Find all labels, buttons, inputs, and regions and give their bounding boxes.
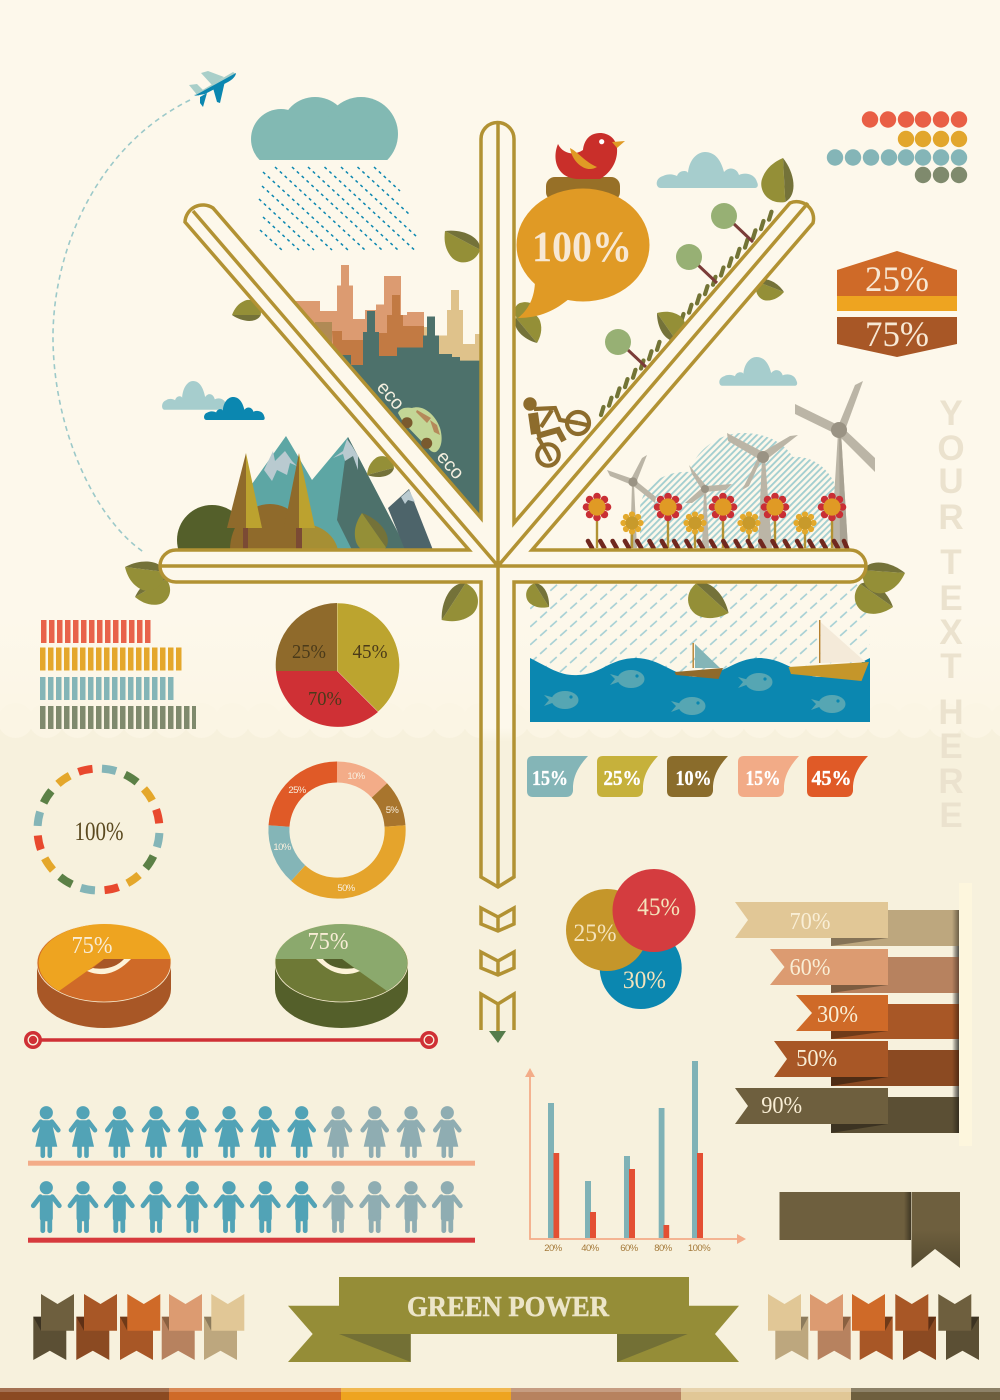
leaves — [122, 158, 906, 633]
percentage tags — [527, 756, 868, 797]
ribbon stack: 60% — [790, 955, 830, 981]
percentage tags: 15% — [532, 766, 568, 790]
percentage tags: 25% — [604, 766, 642, 790]
vertical heading: your text here: E — [939, 796, 963, 835]
vertical heading: your text here: Y — [939, 394, 963, 433]
venn circles: 30% — [623, 967, 666, 994]
icon: clouds right — [657, 152, 797, 386]
tree outline — [160, 122, 866, 887]
icon: green arrow head — [489, 1031, 506, 1043]
100% label: 100% — [532, 224, 632, 271]
icon: round trees on branch — [605, 203, 753, 367]
venn circles: 45% — [637, 894, 680, 921]
grass along branch — [601, 212, 772, 415]
percentage tags: 15% — [746, 766, 780, 790]
vertical heading: your text here: E — [939, 727, 963, 766]
flight path dashed arc — [53, 100, 190, 553]
venn circles — [566, 869, 696, 1009]
road label eco: eco — [372, 377, 408, 414]
pie chart — [276, 603, 400, 727]
dot matrix legend — [827, 111, 967, 183]
ribbon stack: 50% — [796, 1046, 837, 1072]
icon: cyclist — [523, 397, 589, 466]
vertical heading: your text here: O — [937, 429, 965, 468]
vertical heading: your text here: T — [940, 543, 962, 582]
bar chart: 20% — [544, 1243, 563, 1254]
scene: wind farm hills — [583, 381, 875, 548]
label 75%: 75% — [865, 314, 929, 354]
label 75%: 75% — [72, 933, 112, 959]
windmill — [727, 433, 798, 548]
vertical heading: your text here: R — [938, 762, 964, 801]
percentage tags: 10% — [676, 766, 712, 790]
windmill — [685, 465, 732, 548]
pie chart: 70% — [308, 688, 342, 710]
ribbon stack: 70% — [790, 909, 830, 935]
icon: bird on nest — [546, 133, 625, 201]
pie chart: 45% — [352, 641, 388, 663]
vertical heading: your text here: U — [938, 462, 964, 501]
ground strokes — [588, 541, 847, 548]
bar chart: 40% — [581, 1243, 600, 1254]
bookmarks left — [33, 1294, 244, 1360]
rain dashes — [259, 167, 417, 250]
panel: sea with boats — [530, 584, 870, 722]
bar chart: 80% — [654, 1243, 673, 1254]
ribbon stack: 90% — [761, 1093, 802, 1119]
label 25%: 25% — [865, 259, 929, 299]
donut chart: 25% — [288, 785, 307, 796]
bottom colour strip — [0, 1388, 1000, 1400]
label 100%: 100% — [74, 817, 124, 846]
bar chart — [525, 1061, 746, 1254]
3D pie orange — [37, 924, 171, 1028]
brown bookmark ribbon — [780, 1192, 960, 1268]
windmill — [795, 381, 875, 548]
donut chart: 5% — [386, 805, 399, 816]
label 75%: 75% — [308, 929, 348, 955]
vertical heading: your text here: H — [938, 693, 964, 732]
pie chart: 25% — [292, 641, 326, 663]
percentage tags: 45% — [812, 766, 852, 790]
windmill — [607, 455, 656, 548]
vertical heading: your text here: E — [939, 579, 963, 618]
chevrons below trunk — [481, 908, 514, 1032]
speech bubble 100% — [516, 188, 650, 318]
vertical heading: your text here: T — [940, 647, 962, 686]
people row: men — [28, 1181, 475, 1243]
scene: city — [295, 265, 481, 530]
people row: women — [28, 1106, 475, 1166]
icon: rain cloud — [251, 97, 417, 250]
big boat — [788, 620, 869, 681]
bar chart: 100% — [688, 1243, 711, 1254]
vertical heading: your text here — [937, 394, 965, 835]
donut chart: 50% — [337, 883, 356, 894]
donut chart — [273, 771, 399, 894]
banner: green power — [288, 1277, 739, 1362]
vertical heading: your text here: R — [938, 498, 964, 537]
icon: eco car — [398, 407, 442, 452]
banner title: GREEN POWER — [407, 1291, 610, 1323]
hexagon badge 25% 75% — [837, 251, 957, 357]
ribbon stack — [735, 883, 972, 1146]
dashed ring 100% — [12, 743, 185, 916]
3D pie green — [275, 924, 408, 1028]
donut chart: 10% — [273, 842, 292, 853]
bookmarks right — [768, 1294, 979, 1360]
flower stems — [597, 507, 832, 548]
ribbon stack: 30% — [817, 1002, 858, 1028]
striped bar chart — [40, 632, 196, 718]
venn circles: 25% — [574, 920, 616, 947]
icon: airplane — [189, 71, 236, 107]
bar chart: 60% — [620, 1243, 639, 1254]
scene: mountains and trees — [177, 436, 432, 548]
vertical heading: your text here: X — [939, 613, 963, 652]
icon: small clouds left — [162, 381, 265, 420]
small boat — [674, 643, 723, 679]
flowers — [583, 493, 846, 535]
donut chart: 10% — [347, 771, 366, 782]
red timeline — [24, 1031, 438, 1049]
road label eco: eco — [432, 447, 468, 484]
